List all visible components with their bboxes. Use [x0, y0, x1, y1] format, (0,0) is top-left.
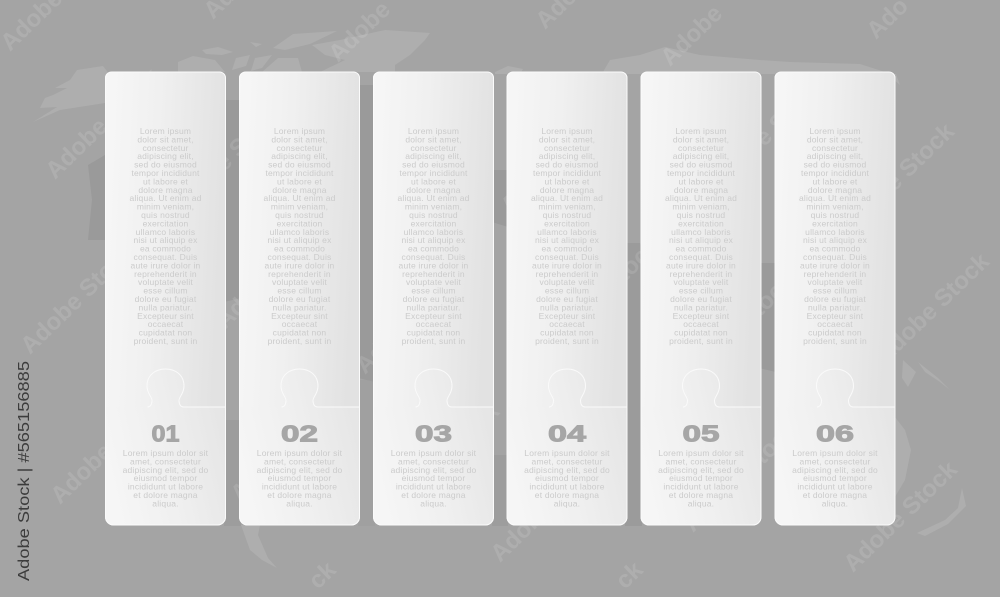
- body text: consectetur: [142, 143, 189, 153]
- caption: aliqua.: [554, 498, 580, 508]
- body text: dolore eu fugiat: [403, 294, 465, 304]
- caption: adipiscing elit, sed do: [524, 465, 610, 475]
- body text: consectetur: [410, 143, 457, 153]
- body text: dolor sit amet,: [539, 134, 595, 144]
- caption: et dolore magna: [803, 490, 867, 500]
- body text: aliqua. Ut enim ad: [665, 193, 737, 203]
- body text: quis nostrud: [677, 210, 725, 220]
- watermarks: Adobe Stock: [165, 98, 290, 219]
- body text: Excepteur sint: [539, 311, 596, 321]
- body text: Excepteur sint: [271, 311, 328, 321]
- body text: Excepteur sint: [137, 311, 194, 321]
- body text: dolore magna: [808, 185, 862, 195]
- body text: Lorem ipsum: [675, 126, 727, 136]
- caption: eiusmod tempor: [402, 473, 465, 483]
- body text: aute irure dolor in: [666, 260, 736, 270]
- body text: nulla pariatur.: [406, 302, 461, 312]
- body text: ut labore et: [143, 176, 188, 186]
- body text: tempor incididunt: [533, 168, 601, 178]
- body text: occaecat: [549, 319, 585, 329]
- body text: voluptate velit: [540, 277, 595, 287]
- body text: nulla pariatur.: [138, 302, 193, 312]
- body text: aute irure dolor in: [532, 260, 602, 270]
- watermarks: Adobe Stock: [40, 63, 165, 184]
- panel: step 06: [774, 72, 896, 526]
- body text: adipiscing elit,: [271, 151, 328, 161]
- watermarks: Adobe Stock: [350, 258, 475, 379]
- body text: occaecat: [817, 319, 853, 329]
- body text: esse cillum: [143, 286, 188, 296]
- body text: adipiscing elit,: [405, 151, 462, 161]
- caption: eiusmod tempor: [268, 473, 331, 483]
- body text: ullamco laboris: [136, 227, 195, 237]
- number: 03: [415, 420, 452, 446]
- body text: dolor sit amet,: [405, 134, 462, 144]
- caption: amet, consectetur: [130, 456, 201, 466]
- caption: amet, consectetur: [532, 456, 602, 466]
- body text: Lorem ipsum: [541, 126, 593, 136]
- number: 04: [548, 420, 586, 446]
- body text: aliqua. Ut enim ad: [263, 193, 336, 203]
- watermarks: Adobe Stock: [705, 73, 830, 194]
- body text: ut labore et: [679, 176, 724, 186]
- watermarks: Adobe Stock: [675, 268, 800, 389]
- body text: exercitation: [544, 218, 590, 228]
- body text: tempor incididunt: [667, 168, 735, 178]
- caption: adipiscing elit, sed do: [658, 465, 744, 475]
- body text: ea commodo: [274, 244, 325, 254]
- body text: esse cillum: [679, 286, 723, 296]
- caption: aliqua.: [688, 498, 714, 508]
- body text: aute irure dolor in: [800, 260, 870, 270]
- body text: consequat. Duis: [402, 252, 465, 262]
- watermarks: Adobe Stock: [225, 386, 350, 507]
- body text: minim veniam,: [271, 202, 328, 212]
- body text: esse cillum: [277, 286, 322, 296]
- body text: occaecat: [416, 319, 452, 329]
- panel: step 05: [640, 72, 762, 526]
- body text: nisi ut aliquip ex: [133, 235, 198, 245]
- body text: adipiscing elit,: [137, 151, 194, 161]
- body text: tempor incididunt: [265, 168, 334, 178]
- caption: amet, consectetur: [666, 456, 736, 466]
- body text: ullamco laboris: [805, 227, 865, 237]
- body text: consequat. Duis: [803, 252, 867, 262]
- watermarks: Adobe Stock: [380, 398, 505, 519]
- body text: cupidatat non: [273, 328, 326, 338]
- number: 02: [281, 420, 318, 446]
- body text: minim veniam,: [672, 202, 730, 212]
- body text: dolore eu fugiat: [269, 294, 331, 304]
- body text: cupidatat non: [407, 328, 460, 338]
- panel: step 01: [105, 72, 226, 526]
- caption: adipiscing elit, sed do: [123, 465, 209, 475]
- body text: dolore eu fugiat: [804, 294, 866, 304]
- body text: quis nostrud: [409, 210, 458, 220]
- body text: Lorem ipsum: [274, 126, 325, 136]
- caption: Lorem ipsum dolor sit: [524, 448, 610, 458]
- caption: et dolore magna: [133, 490, 198, 500]
- watermarks: Adobe: [655, 0, 728, 71]
- body text: ea commodo: [675, 244, 727, 254]
- caption: eiusmod tempor: [669, 473, 733, 483]
- body text: Excepteur sint: [673, 311, 730, 321]
- body text: ut labore et: [813, 176, 858, 186]
- body text: minim veniam,: [806, 202, 864, 212]
- body text: minim veniam,: [405, 202, 462, 212]
- body text: dolore eu fugiat: [536, 294, 598, 304]
- caption: amet, consectetur: [264, 456, 335, 466]
- body text: occaecat: [282, 319, 318, 329]
- caption: incididunt ut labore: [128, 482, 203, 492]
- body text: nisi ut aliquip ex: [267, 235, 332, 245]
- body text: dolor sit amet,: [673, 134, 729, 144]
- watermarks: Adobe Stock: [678, 416, 803, 537]
- caption: incididunt ut labore: [663, 482, 739, 492]
- panel: step 03: [373, 72, 494, 526]
- caption: aliqua.: [822, 498, 848, 508]
- body text: proident, sunt in: [268, 336, 332, 346]
- number: 06: [816, 420, 854, 446]
- body text: Lorem ipsum: [140, 126, 191, 136]
- body text: reprehenderit in: [804, 269, 866, 279]
- body text: reprehenderit in: [134, 269, 197, 279]
- body text: voluptate velit: [674, 277, 729, 287]
- body text: dolor sit amet,: [807, 134, 863, 144]
- body text: tempor incididunt: [131, 168, 200, 178]
- body text: consequat. Duis: [669, 252, 733, 262]
- body text: consectetur: [276, 143, 323, 153]
- caption: Lorem ipsum dolor sit: [792, 448, 878, 458]
- body text: nulla pariatur.: [808, 302, 862, 312]
- caption: amet, consectetur: [398, 456, 469, 466]
- watermarks: Adobe Stock: [838, 456, 963, 577]
- body text: ea commodo: [140, 244, 191, 254]
- body text: ea commodo: [809, 244, 861, 254]
- body text: voluptate velit: [138, 277, 193, 287]
- body text: adipiscing elit,: [539, 151, 595, 161]
- body text: sed do eiusmod: [536, 160, 598, 170]
- body text: nisi ut aliquip ex: [803, 235, 868, 245]
- body text: dolore magna: [406, 185, 461, 195]
- panel: step 02: [239, 72, 360, 526]
- caption: aliqua.: [420, 498, 447, 508]
- body text: occaecat: [148, 319, 184, 329]
- caption: Lorem ipsum dolor sit: [123, 448, 209, 458]
- body text: ullamco laboris: [537, 227, 597, 237]
- body text: cupidatat non: [139, 328, 192, 338]
- body text: reprehenderit in: [268, 269, 331, 279]
- body text: consectetur: [678, 143, 724, 153]
- body text: exercitation: [411, 218, 457, 228]
- caption: eiusmod tempor: [535, 473, 599, 483]
- caption: adipiscing elit, sed do: [792, 465, 878, 475]
- body text: voluptate velit: [272, 277, 327, 287]
- body text: sed do eiusmod: [268, 160, 331, 170]
- caption: Lorem ipsum dolor sit: [391, 448, 477, 458]
- caption: aliqua.: [286, 498, 313, 508]
- body text: consequat. Duis: [268, 252, 331, 262]
- caption: incididunt ut labore: [396, 482, 471, 492]
- watermarks: Adobe Stock: [870, 248, 995, 369]
- caption: adipiscing elit, sed do: [391, 465, 477, 475]
- caption: et dolore magna: [535, 490, 599, 500]
- number: 01: [151, 420, 180, 446]
- body text: voluptate velit: [406, 277, 461, 287]
- watermarks: Adobe Stock: [45, 388, 170, 509]
- body text: sed do eiusmod: [134, 160, 197, 170]
- body text: Excepteur sint: [405, 311, 462, 321]
- watermarks: ck: [610, 556, 649, 594]
- watermarks: Adobe Stock: [485, 446, 610, 567]
- body text: proident, sunt in: [134, 336, 198, 346]
- watermarks: ck: [303, 556, 342, 594]
- body text: aute irure dolor in: [265, 260, 335, 270]
- body text: ullamco laboris: [270, 227, 329, 237]
- body text: consequat. Duis: [134, 252, 197, 262]
- body text: consequat. Duis: [535, 252, 599, 262]
- body text: aliqua. Ut enim ad: [129, 193, 202, 203]
- body text: consectetur: [544, 143, 590, 153]
- body text: nulla pariatur.: [272, 302, 327, 312]
- caption: amet, consectetur: [800, 456, 870, 466]
- body text: adipiscing elit,: [807, 151, 863, 161]
- body text: exercitation: [143, 218, 189, 228]
- body text: quis nostrud: [275, 210, 324, 220]
- body text: Lorem ipsum: [408, 126, 459, 136]
- body text: quis nostrud: [811, 210, 859, 220]
- body text: aute irure dolor in: [131, 260, 201, 270]
- body text: nulla pariatur.: [540, 302, 594, 312]
- body text: ea commodo: [541, 244, 593, 254]
- body text: aliqua. Ut enim ad: [799, 193, 871, 203]
- caption: et dolore magna: [669, 490, 733, 500]
- body text: aliqua. Ut enim ad: [397, 193, 470, 203]
- body text: exercitation: [678, 218, 724, 228]
- body text: cupidatat non: [540, 328, 594, 338]
- body text: dolore magna: [674, 185, 728, 195]
- body text: ullamco laboris: [671, 227, 731, 237]
- body text: esse cillum: [813, 286, 857, 296]
- body text: dolore magna: [138, 185, 193, 195]
- body text: occaecat: [683, 319, 719, 329]
- body text: nulla pariatur.: [674, 302, 728, 312]
- body text: exercitation: [812, 218, 858, 228]
- panel: step 04: [506, 72, 628, 526]
- caption: Lorem ipsum dolor sit: [257, 448, 343, 458]
- caption: eiusmod tempor: [134, 473, 197, 483]
- body text: sed do eiusmod: [670, 160, 732, 170]
- body text: exercitation: [277, 218, 323, 228]
- watermarks: Adobe Stock: [210, 213, 335, 334]
- body text: ullamco laboris: [404, 227, 463, 237]
- body text: ut labore et: [411, 176, 456, 186]
- caption: adipiscing elit, sed do: [257, 465, 343, 475]
- map: darker land behind gaps: [88, 85, 776, 526]
- caption: incididunt ut labore: [797, 482, 873, 492]
- body text: voluptate velit: [808, 277, 863, 287]
- body text: quis nostrud: [141, 210, 190, 220]
- watermarks: Adobe Stock: [370, 88, 495, 209]
- number: 05: [682, 420, 720, 446]
- body text: quis nostrud: [543, 210, 591, 220]
- caption: et dolore magna: [401, 490, 466, 500]
- watermarks: Adobe Stock: [495, 98, 620, 219]
- watermarks: Adobe Stock: [835, 118, 960, 239]
- watermarks: Adobe Stock: [15, 238, 140, 359]
- caption: et dolore magna: [267, 490, 332, 500]
- caption: incididunt ut labore: [262, 482, 337, 492]
- body text: sed do eiusmod: [402, 160, 465, 170]
- body text: nisi ut aliquip ex: [669, 235, 734, 245]
- body text: ea commodo: [408, 244, 459, 254]
- caption: incididunt ut labore: [529, 482, 605, 492]
- body text: dolor sit amet,: [271, 134, 328, 144]
- body text: ut labore et: [277, 176, 322, 186]
- stock id: Adobe Stock | #565156885: [16, 361, 33, 581]
- body text: aliqua. Ut enim ad: [531, 193, 603, 203]
- caption: aliqua.: [152, 498, 179, 508]
- caption: Lorem ipsum dolor sit: [658, 448, 744, 458]
- body text: ut labore et: [545, 176, 590, 186]
- body text: proident, sunt in: [669, 336, 733, 346]
- body text: adipiscing elit,: [673, 151, 729, 161]
- body text: dolore eu fugiat: [135, 294, 197, 304]
- body text: nisi ut aliquip ex: [535, 235, 600, 245]
- body text: dolore magna: [272, 185, 327, 195]
- body text: dolor sit amet,: [137, 134, 194, 144]
- body text: tempor incididunt: [399, 168, 468, 178]
- body text: dolore eu fugiat: [670, 294, 732, 304]
- body text: minim veniam,: [137, 202, 194, 212]
- body text: nisi ut aliquip ex: [401, 235, 466, 245]
- body text: Lorem ipsum: [809, 126, 861, 136]
- body text: reprehenderit in: [670, 269, 732, 279]
- body text: esse cillum: [545, 286, 589, 296]
- body text: proident, sunt in: [535, 336, 599, 346]
- body text: proident, sunt in: [803, 336, 867, 346]
- body text: esse cillum: [411, 286, 456, 296]
- body text: minim veniam,: [538, 202, 596, 212]
- body text: dolore magna: [540, 185, 594, 195]
- body text: cupidatat non: [808, 328, 862, 338]
- body text: cupidatat non: [674, 328, 728, 338]
- body text: proident, sunt in: [402, 336, 466, 346]
- body text: sed do eiusmod: [804, 160, 866, 170]
- body text: reprehenderit in: [402, 269, 465, 279]
- watermarks: Adobe Stock: [540, 233, 665, 354]
- body text: Excepteur sint: [807, 311, 864, 321]
- caption: eiusmod tempor: [803, 473, 867, 483]
- body text: tempor incididunt: [801, 168, 869, 178]
- body text: reprehenderit in: [536, 269, 598, 279]
- body text: aute irure dolor in: [399, 260, 469, 270]
- body text: consectetur: [812, 143, 858, 153]
